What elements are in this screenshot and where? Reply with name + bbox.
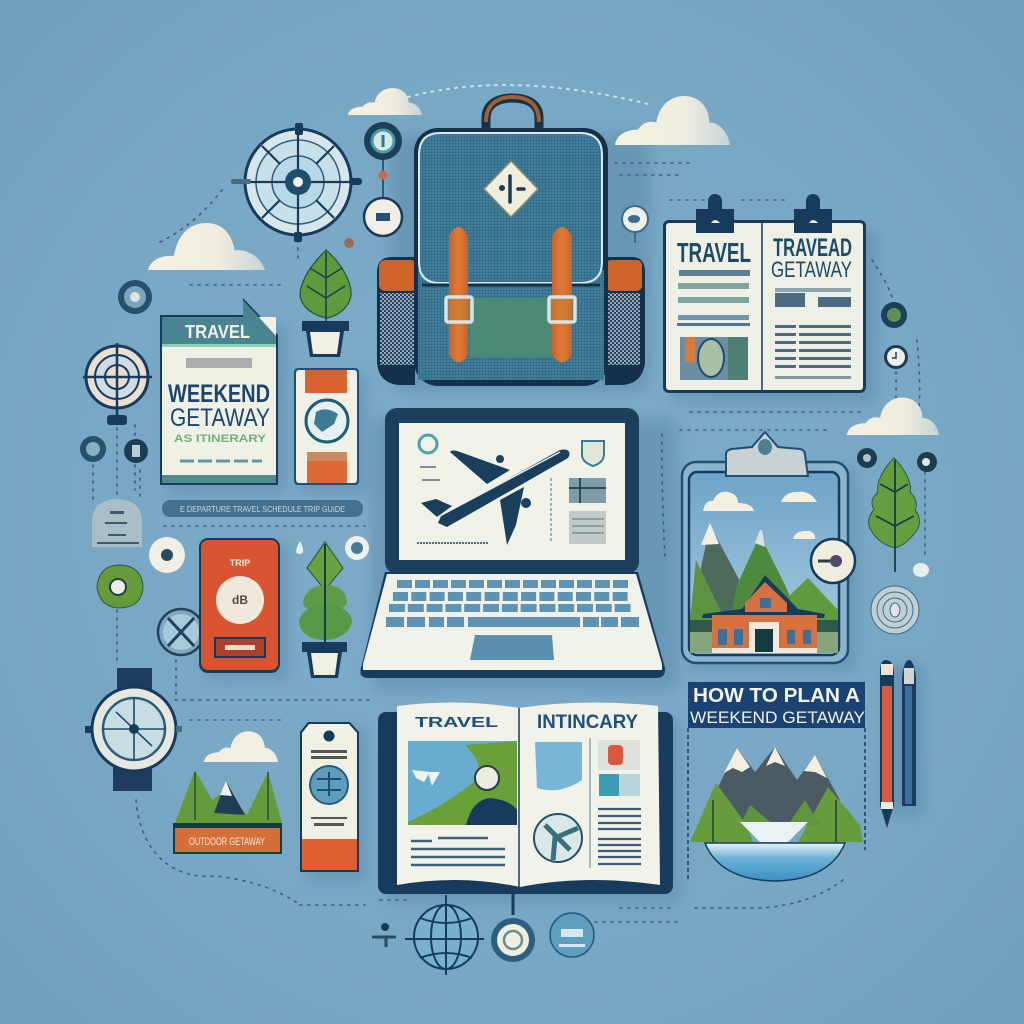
icon: compass wheel (231, 123, 362, 242)
heading right: GETAWAY (771, 257, 852, 282)
book right title: INTINCARY (537, 712, 638, 733)
scene clouds (703, 492, 817, 539)
icon: top-left small button (118, 280, 152, 314)
icon: blue label circle (550, 913, 594, 957)
icon: white blob (913, 563, 929, 577)
flyer subtitle: AS ITINERARY (174, 433, 267, 445)
straps (449, 227, 572, 362)
screen (385, 408, 639, 574)
icon: white drop (296, 541, 303, 554)
icon: dark badge right of leaf (917, 452, 937, 472)
flyer: weekend getaway (160, 298, 278, 485)
clip (726, 432, 808, 476)
heading left: TRAVEL (677, 237, 751, 268)
airplane (421, 449, 570, 545)
icon: teal button (364, 122, 402, 160)
left picture (680, 337, 748, 380)
heading right: TRAVEAD (773, 234, 852, 262)
right copy (775, 288, 851, 379)
diamond patch (484, 161, 538, 217)
flyer main heading: WEEKEND (168, 380, 270, 408)
plant 2 (299, 542, 352, 678)
icon: white badge (364, 198, 402, 236)
icon: leaf plant right (869, 458, 919, 572)
icon: connector dot (378, 160, 388, 197)
icon: wrist watch (85, 668, 182, 791)
dotted route lines (93, 85, 925, 922)
title line 2: WEEKEND GETAWAY (690, 708, 865, 727)
cloud: lower left (204, 731, 278, 762)
book map (408, 741, 517, 825)
cloud: top centre (348, 88, 422, 115)
mountains (690, 523, 838, 653)
body (414, 128, 608, 386)
laptop (360, 408, 665, 678)
cloud: right (847, 398, 939, 435)
pencil (880, 660, 894, 828)
icon: globe (405, 895, 484, 975)
handle (486, 98, 539, 130)
ticket card (294, 368, 359, 485)
passport: red (199, 538, 280, 673)
icon: small dial right (124, 439, 148, 463)
icon: white round badge (149, 537, 185, 573)
icon: spiral button (491, 918, 535, 962)
icon: pin (372, 923, 396, 947)
flyer main heading: GETAWAY (170, 404, 270, 432)
icon: dark badge left of leaf (857, 448, 877, 468)
plant 1 (300, 250, 351, 357)
mountain sign: OUTDOOR GETAWAY (189, 836, 265, 848)
icon: clock badge (884, 345, 908, 369)
flyer main heading (168, 380, 270, 432)
passport: red: dB (232, 593, 248, 607)
lake and mountain scene (688, 728, 865, 881)
icon: green round button (881, 302, 907, 328)
luggage tag (300, 722, 359, 872)
heading right (771, 234, 852, 282)
newspaper: travel getaway (663, 194, 866, 393)
icon: cross compass (158, 609, 204, 655)
building (702, 575, 825, 653)
clipboard scene (682, 432, 855, 663)
icon: small badge near plant (345, 536, 369, 560)
info bar: E DEPARTURE TRAVEL SCHEDULE TRIP GUIDE (180, 505, 345, 514)
info bar (162, 500, 363, 517)
title line 1: HOW TO PLAN A (693, 685, 860, 707)
icon: target (83, 343, 152, 425)
title block: how to plan a weekend getaway (688, 682, 865, 728)
cloud: top right (615, 96, 730, 145)
backpack (377, 97, 645, 386)
flyer title: TRAVEL (185, 322, 250, 342)
book left title: TRAVEL (415, 714, 498, 731)
flyer header (162, 300, 276, 344)
binder clips (696, 194, 832, 233)
pen (902, 660, 916, 806)
icon: small brown dot (344, 238, 354, 248)
book right pictures (534, 738, 640, 868)
trackpad (470, 635, 554, 660)
right pocket (605, 257, 645, 385)
passport: red: TRIP (230, 558, 250, 568)
icon: small right badge (622, 206, 648, 243)
keyboard (386, 580, 639, 627)
icon: concentric dial (871, 586, 919, 634)
badge on clipboard (811, 539, 855, 583)
cloud: left (148, 223, 265, 270)
note bubble (92, 499, 142, 547)
book right copy (598, 809, 641, 864)
open book: travel itinerary (378, 702, 673, 915)
mountain sign (173, 770, 282, 854)
laptop base (360, 572, 665, 678)
icon: green button (97, 565, 143, 608)
icon: small dial left (80, 436, 106, 462)
left pocket (377, 257, 415, 385)
book left copy (411, 838, 505, 865)
left copy (677, 270, 750, 326)
screen widgets (417, 435, 606, 544)
buckles (446, 297, 575, 322)
flap (419, 133, 602, 283)
